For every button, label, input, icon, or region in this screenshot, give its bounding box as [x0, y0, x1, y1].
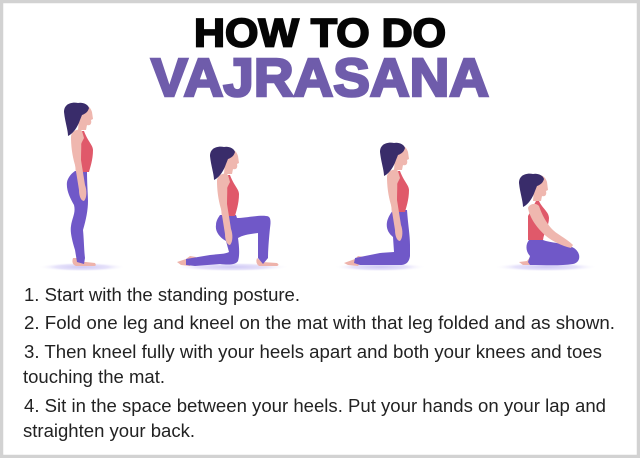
step 4: straighten your back.: [23, 421, 195, 441]
heading: how to do: HOW TO DO: [194, 12, 446, 56]
step 1: 1. Start with the standing posture.: [24, 285, 300, 305]
step 3: 3. Then kneel fully with your heels apart and both your knees and toes: [24, 342, 602, 362]
step 3: touching the mat.: [23, 367, 165, 387]
title: [151, 12, 489, 108]
heading: vajrasana: VAJRASANA: [151, 48, 489, 108]
step 2: 2. Fold one leg and kneel on the mat with that leg folded and as shown.: [24, 313, 615, 333]
figure 4: seated vajrasana: [494, 174, 598, 272]
figure 3: kneeling fully: [334, 143, 426, 272]
step 4: [23, 396, 606, 441]
step 3: [23, 342, 602, 387]
step 4: 4. Sit in the space between your heels. Put your hands on your lap and: [24, 396, 606, 416]
figure 1: standing posture: [38, 103, 126, 272]
figure 2: kneeling on one leg: [174, 147, 290, 272]
instructions: [23, 285, 615, 441]
